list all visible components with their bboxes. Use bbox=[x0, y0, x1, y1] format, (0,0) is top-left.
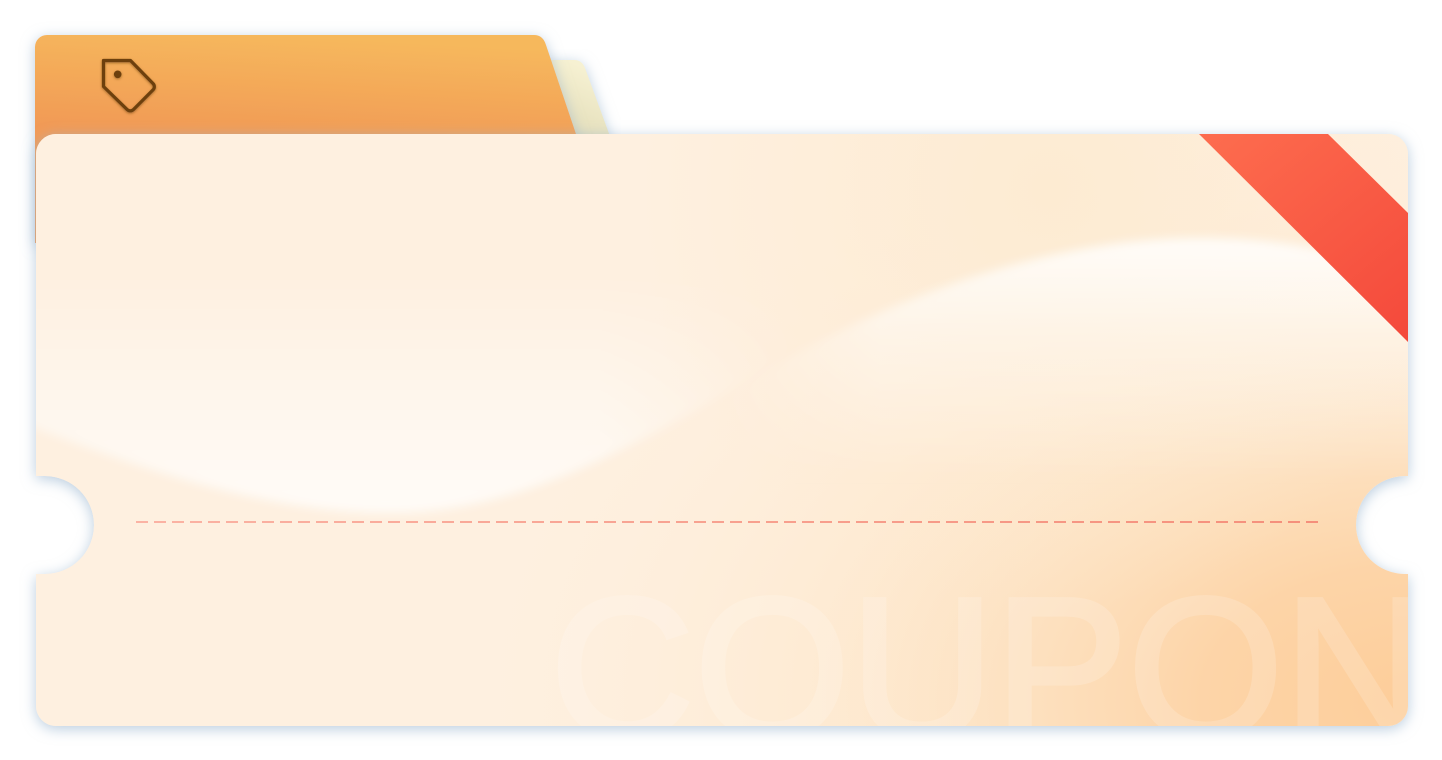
icon: price tag bbox=[104, 60, 154, 111]
wave right bbox=[824, 234, 1408, 425]
back tab bbox=[540, 60, 615, 150]
dashed divider bbox=[136, 521, 1318, 523]
ticket body bbox=[36, 134, 1408, 726]
wave left bbox=[36, 358, 678, 514]
front orange tab bbox=[35, 35, 590, 243]
ribbon bbox=[1199, 134, 1408, 342]
